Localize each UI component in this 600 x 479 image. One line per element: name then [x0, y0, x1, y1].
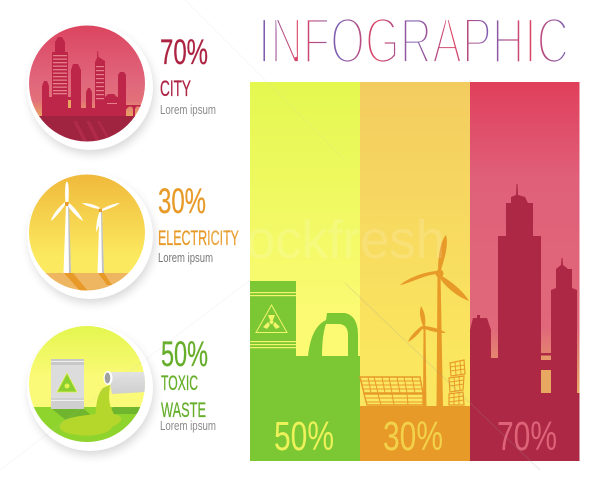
- panel: electricity column: [360, 82, 470, 461]
- text block: city: CITY: [160, 76, 191, 101]
- bar: orange 30%: [360, 406, 470, 461]
- text block: electricity: 30%: [158, 182, 206, 221]
- text block: toxic waste: WASTE: [161, 399, 206, 422]
- panel: toxic waste column: [250, 82, 360, 461]
- icon: leaking pipe silhouette: [308, 313, 358, 357]
- text block: electricity: Lorem ipsum: [158, 250, 213, 265]
- icon: skyline gaps: [541, 356, 551, 393]
- panel: column chart: [250, 82, 580, 461]
- text block: electricity: ELECTRICITY: [158, 227, 239, 250]
- icon: barrel: [51, 365, 84, 398]
- icon: pipe: [108, 372, 146, 394]
- icon: puddle: [60, 412, 121, 436]
- text block: city: [160, 33, 216, 117]
- watermark: stockfresh: [205, 210, 445, 270]
- icon: barrel silhouette: [250, 281, 296, 356]
- icon: toxic waste scene: [29, 326, 146, 443]
- icon: city scene: [29, 25, 145, 143]
- panel: toxic waste badge: [27, 325, 154, 455]
- text block: electricity: [158, 182, 239, 265]
- text block: city: Lorem ipsum: [160, 102, 216, 117]
- text block: toxic waste: Lorem ipsum: [160, 418, 216, 433]
- label: 50%: 50%: [274, 413, 334, 459]
- icon: solar panels: [360, 360, 465, 405]
- label: 30%: 30%: [383, 413, 443, 459]
- icon: city skyline: [470, 184, 580, 461]
- text block: toxic waste: TOXIC: [161, 372, 198, 395]
- icon: small wind turbine: [408, 306, 446, 406]
- bar: green 50%: [250, 356, 360, 461]
- text block: city: 70%: [160, 33, 208, 72]
- label: 70%: 70%: [497, 413, 557, 459]
- text block: toxic waste: [160, 335, 216, 433]
- icon: large wind turbine: [400, 235, 469, 406]
- panel: city column: [470, 82, 580, 461]
- panel: city badge: [27, 24, 154, 154]
- text block: toxic waste: 50%: [161, 335, 208, 374]
- icon: wind turbines scene: [29, 174, 145, 293]
- panel: electricity badge: [27, 173, 154, 303]
